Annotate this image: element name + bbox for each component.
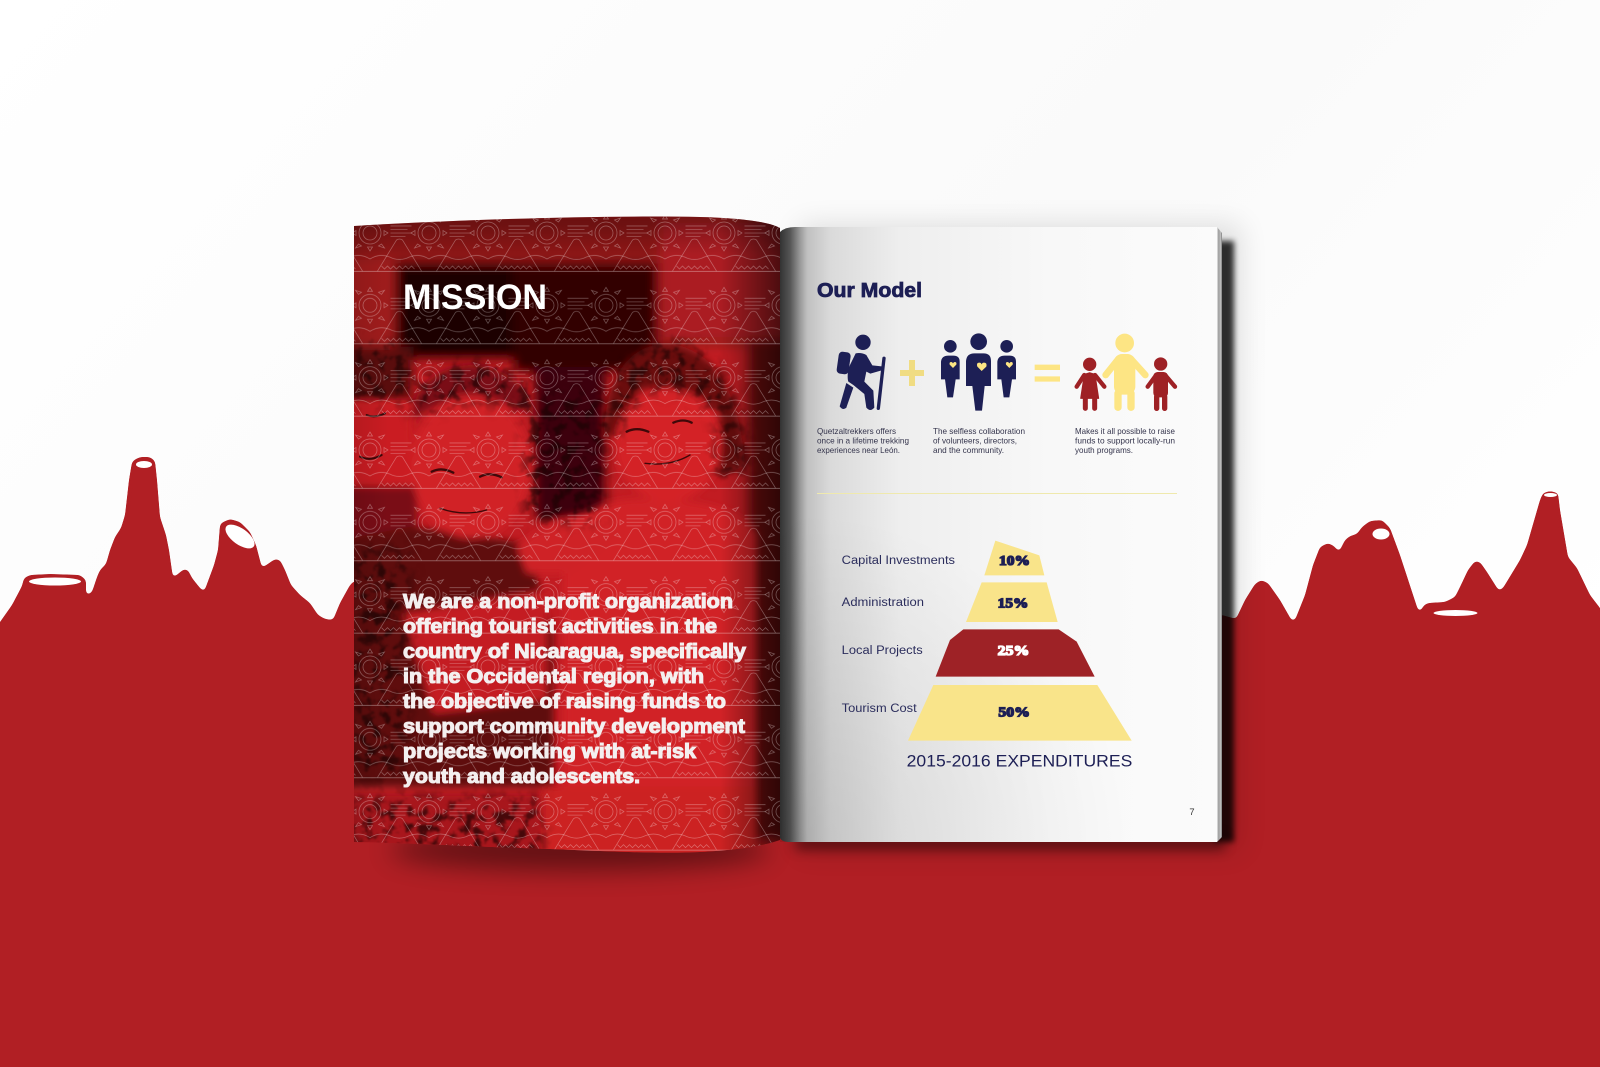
caption: trekking: Quetzaltrekkers offers <box>817 426 896 436</box>
caption: result <box>1075 426 1175 455</box>
text block: mission statement: youth and adolescents. <box>403 765 640 788</box>
caption: collaboration <box>933 426 1025 455</box>
label: Administration: Administration <box>842 595 924 609</box>
text block: mission statement: projects working with at-risk <box>403 740 697 763</box>
pyramid tier: 50% <box>908 685 1132 741</box>
right page paper <box>780 227 1217 842</box>
label: Tourism Cost: Tourism Cost <box>842 701 917 715</box>
text block: mission statement: the objective of raising funds to <box>403 690 726 713</box>
label: Local Projects: Local Projects <box>842 643 923 657</box>
label: Capital Investments: Capital Investments <box>842 553 955 567</box>
pyramid tier: 15%: 15% <box>998 596 1028 611</box>
caption: result: youth programs. <box>1075 445 1133 455</box>
page edge vignette <box>354 215 780 855</box>
facial features <box>360 413 692 513</box>
chart title: 2015-2016 EXPENDITURES <box>907 752 1132 771</box>
text block: mission statement: in the Occidental region, with <box>403 665 704 688</box>
page top shading <box>354 216 780 248</box>
text block: mission statement <box>403 590 747 788</box>
pyramid tier: 10% <box>984 541 1044 575</box>
icon: family <box>1077 334 1175 408</box>
red volcano skyline <box>0 457 1600 1067</box>
pyramid tier: 25%: 25% <box>998 644 1029 659</box>
caption: collaboration: and the community. <box>933 445 1004 455</box>
right page edge <box>1217 227 1222 842</box>
icon: three people with hearts <box>941 333 1016 411</box>
panel: right page <box>780 227 1222 842</box>
caption: result: Makes it all possible to raise <box>1075 426 1175 436</box>
text block: mission statement: We are a non-profit organization <box>403 590 733 613</box>
caption: collaboration: of volunteers, directors, <box>933 436 1017 446</box>
pyramid tier: 10%: 10% <box>999 554 1030 569</box>
text block: mission statement: support community development <box>403 715 745 738</box>
page number: 7 <box>1189 807 1195 817</box>
pyramid tier: 50%: 50% <box>998 706 1030 721</box>
pyramid tier: 15% <box>966 582 1058 622</box>
right page lower shading <box>780 500 1217 842</box>
photo: children tinted red <box>354 216 780 853</box>
caption: result: funds to support locally-run <box>1075 436 1175 446</box>
chart: expenditures pyramid <box>842 541 1195 817</box>
text block: mission statement: country of Nicaragua, specifically <box>403 640 747 663</box>
caption: trekking <box>817 426 909 455</box>
text block: mission statement: offering tourist activities in the <box>403 615 717 638</box>
icon: equals <box>1035 365 1060 382</box>
caption: trekking: experiences near León. <box>817 445 900 455</box>
tribal sun and mountain pattern <box>354 213 780 855</box>
icon: plus <box>900 360 924 386</box>
hair and clothing texture <box>353 342 747 863</box>
model captions <box>817 426 1175 455</box>
panel: left page <box>354 216 780 853</box>
heading: Our Model: Our Model <box>817 280 922 302</box>
caption: trekking: once in a lifetime trekking <box>817 436 909 446</box>
pyramid tier: 25% <box>936 629 1095 677</box>
icon: hiker <box>836 335 884 410</box>
heading: MISSION: MISSION <box>403 278 547 317</box>
model icons <box>836 333 1175 411</box>
book drop shadows <box>390 225 1240 870</box>
caption: collaboration: The selfless collaboration <box>933 426 1025 436</box>
